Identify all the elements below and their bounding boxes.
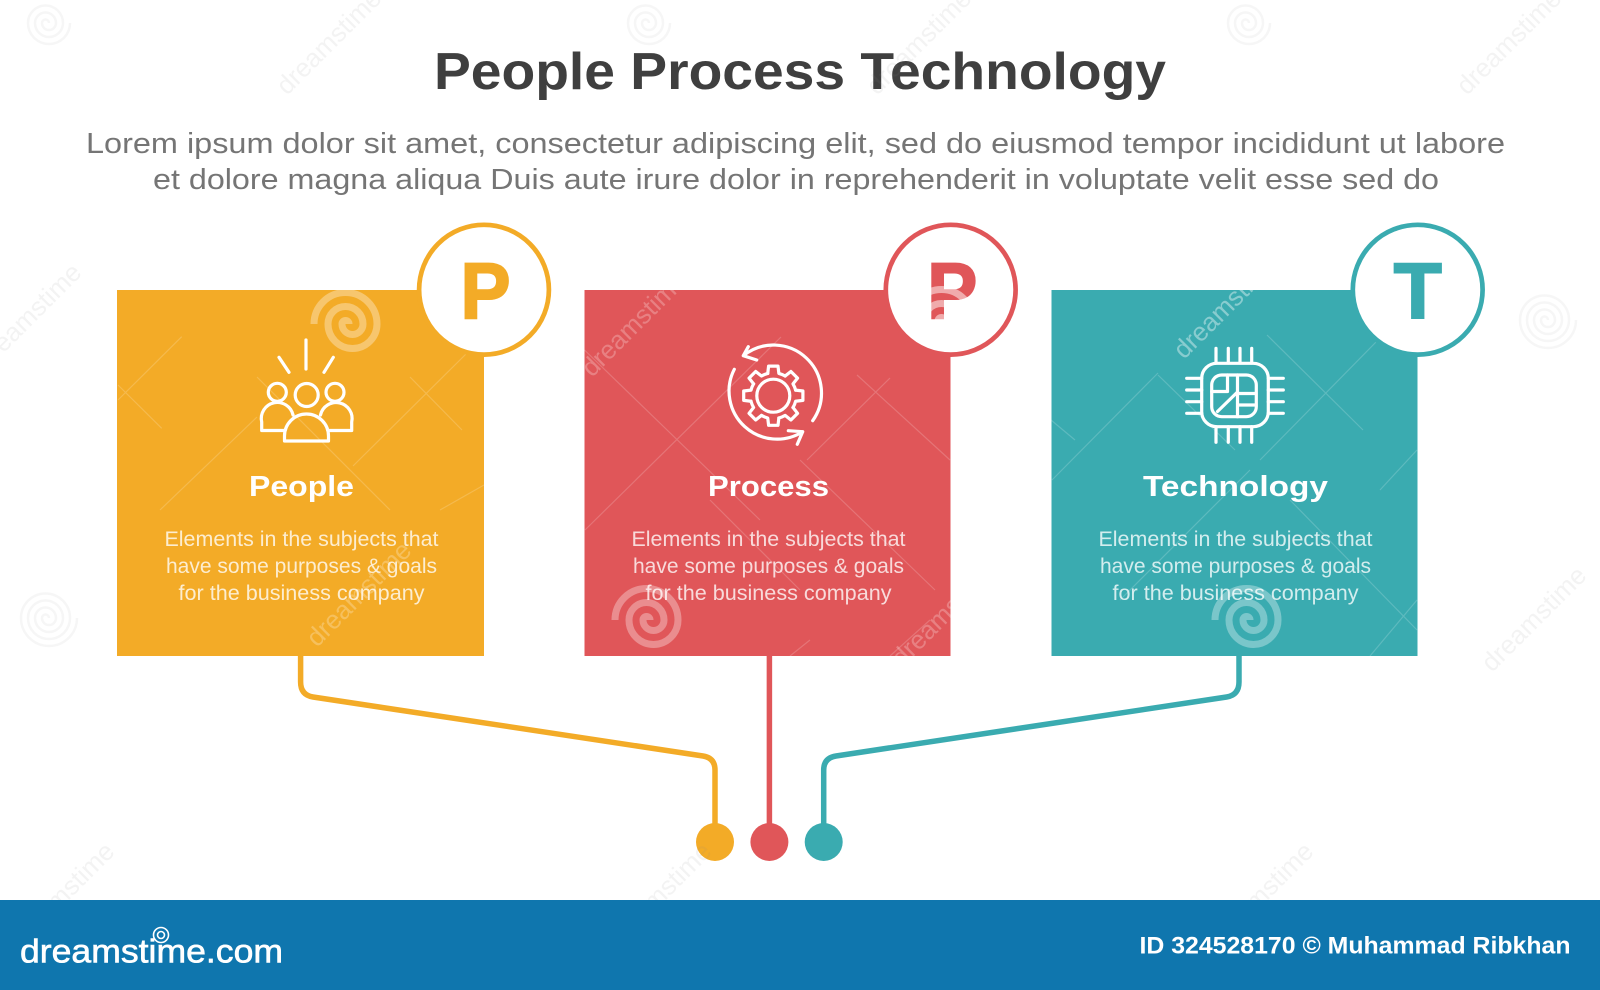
badge: T bbox=[1353, 225, 1483, 355]
watermark lines bbox=[118, 337, 484, 510]
footer logo text: dreamstime.com bbox=[20, 932, 283, 970]
card heading: Process bbox=[708, 471, 829, 503]
connector lines and dots bbox=[301, 654, 1239, 861]
card text: have some purposes & goals bbox=[633, 555, 904, 578]
card heading: People bbox=[249, 471, 354, 503]
card background bbox=[584, 290, 950, 656]
icon: technology chip bbox=[1187, 348, 1283, 442]
watermark spiral bbox=[615, 588, 678, 644]
watermark text: dreamstime bbox=[3, 836, 120, 953]
panel: process bbox=[584, 225, 1016, 656]
card text: have some purposes & goals bbox=[166, 555, 437, 578]
panel: people bbox=[117, 225, 549, 656]
watermark text: dreamstime bbox=[1167, 247, 1284, 364]
card text: Elements in the subjects that bbox=[1098, 528, 1373, 551]
icon: process gear bbox=[729, 345, 821, 444]
icon: people bbox=[261, 340, 352, 441]
watermark text: dreamstime bbox=[1475, 560, 1592, 677]
badge: P bbox=[419, 225, 549, 355]
panel: technology bbox=[1051, 225, 1483, 656]
card text: Elements in the subjects that bbox=[164, 528, 439, 551]
badge: T: T bbox=[1394, 246, 1442, 335]
card text: for the business company bbox=[646, 582, 892, 605]
watermark spiral bbox=[1215, 588, 1278, 644]
connector: technology bbox=[805, 654, 1239, 861]
footer logo spiral bbox=[154, 928, 168, 942]
watermark text: dreamstime bbox=[600, 836, 717, 953]
connector: process bbox=[750, 654, 788, 861]
watermark text: dreamstime bbox=[300, 535, 417, 652]
card background bbox=[117, 290, 484, 656]
watermark lines bbox=[584, 337, 950, 656]
badge: P bbox=[886, 225, 1016, 355]
badge: P: P bbox=[927, 246, 977, 335]
watermark text: dreamstime bbox=[1202, 836, 1319, 953]
footer credit: ID 324528170 © Muhammad Ribkhan bbox=[1140, 932, 1570, 959]
watermark on white background bbox=[21, 6, 1576, 646]
title: People Process Technology bbox=[434, 43, 1166, 101]
subtitle bbox=[86, 128, 1505, 196]
card text: for the business company bbox=[178, 582, 425, 605]
subtitle: Lorem ipsum dolor sit amet, consectetur adipiscing elit, sed do eiusmod tempor incididunt ut labore bbox=[86, 128, 1505, 160]
badge: P: P bbox=[460, 246, 510, 335]
card text: Elements in the subjects that bbox=[632, 528, 906, 551]
footer bar bbox=[0, 900, 1600, 990]
card text bbox=[632, 528, 906, 605]
card background bbox=[1052, 290, 1418, 656]
watermark lines bbox=[1051, 335, 1417, 656]
subtitle: et dolore magna aliqua Duis aute irure dolor in reprehenderit in voluptate velit esse sed do bbox=[153, 164, 1439, 196]
card heading: Technology bbox=[1143, 471, 1328, 503]
watermark text: dreamstime bbox=[575, 265, 692, 382]
card text: for the business company bbox=[1112, 582, 1359, 605]
card text: have some purposes & goals bbox=[1100, 555, 1371, 578]
watermark text: dreamstime bbox=[885, 555, 1002, 672]
watermark spiral bbox=[314, 292, 377, 348]
connector: people bbox=[301, 654, 734, 861]
card text bbox=[164, 528, 439, 605]
card text bbox=[1098, 528, 1373, 605]
